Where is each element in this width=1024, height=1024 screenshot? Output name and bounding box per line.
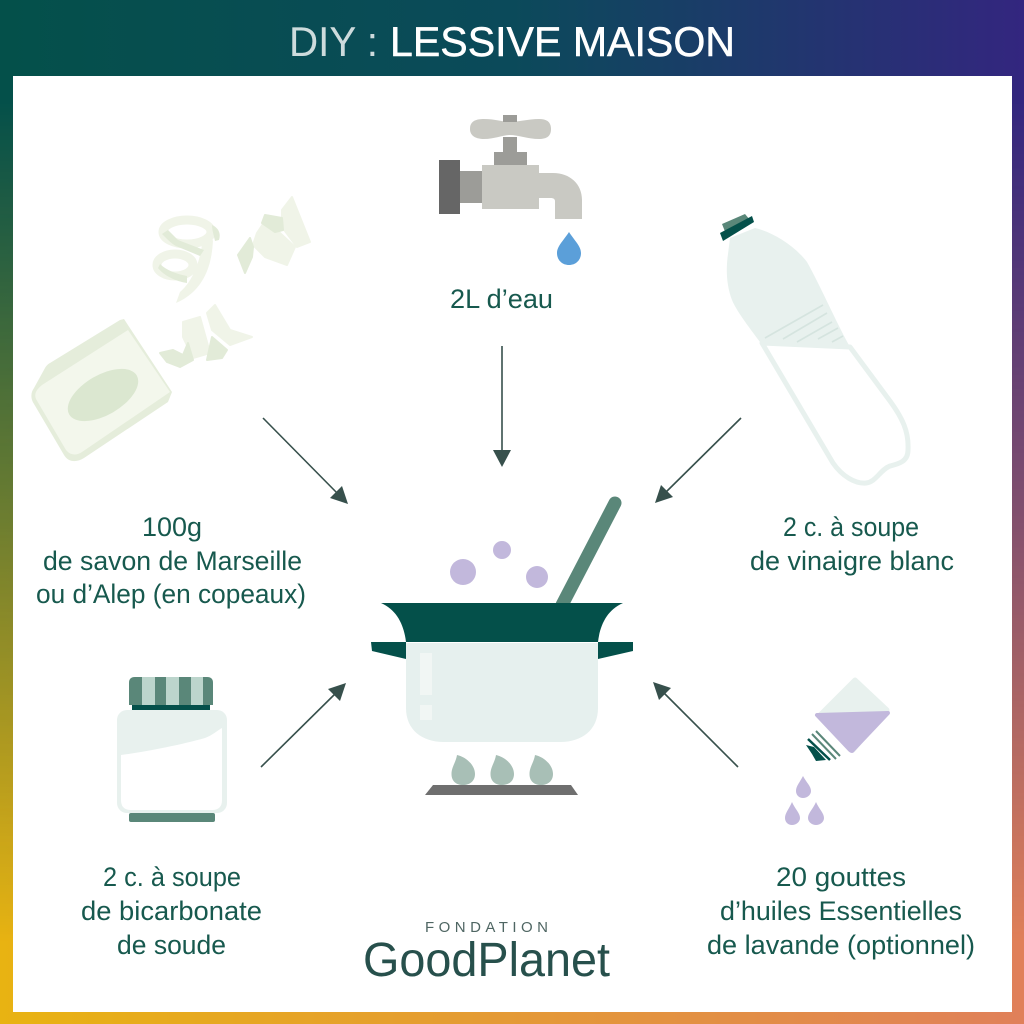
- arrow: vinegar to pot: [655, 418, 741, 503]
- label: soap: de savon de Marseille: [43, 546, 302, 576]
- label: bicarbonate: 2 c. à soupe: [103, 862, 241, 892]
- icon: tap with water drop: [439, 115, 582, 265]
- label: soap: 100g: [142, 512, 202, 542]
- label: essential oils: 20 gouttes: [776, 862, 906, 892]
- icon: bicarbonate jar: [117, 677, 227, 822]
- arrow: bicarbonate to pot: [261, 683, 346, 767]
- icon: essential oil bottle and drops: [785, 680, 888, 825]
- label: essential oils: [707, 862, 975, 960]
- label: soap: [36, 512, 306, 609]
- logo: Fondation GoodPlanet: GoodPlanet: [363, 934, 610, 987]
- icon: vinegar bottle: [720, 214, 908, 483]
- arrow: soap to pot: [263, 418, 348, 504]
- arrow: essential oil to pot: [653, 682, 738, 767]
- label: vinegar: 2 c. à soupe: [783, 512, 919, 542]
- logo: Fondation GoodPlanet: FONDATION: [425, 919, 548, 936]
- label: essential oils: de lavande (optionnel): [707, 930, 975, 960]
- label: water: 2L d’eau: [450, 284, 553, 314]
- label: vinegar: de vinaigre blanc: [750, 546, 954, 576]
- label: soap: ou d’Alep (en copeaux): [36, 579, 306, 609]
- label: bicarbonate: de soude: [117, 930, 226, 960]
- title: LESSIVE MAISON: [390, 18, 735, 65]
- icon: cooking pot on burner: [371, 503, 633, 795]
- label: vinegar: [750, 512, 954, 576]
- label: essential oils: d’huiles Essentielles: [720, 896, 962, 926]
- icon: soap block and shavings: [31, 197, 310, 461]
- title: DIY :: [289, 18, 378, 65]
- label: bicarbonate: [81, 862, 262, 960]
- arrow: water to pot: [493, 346, 511, 467]
- label: bicarbonate: de bicarbonate: [81, 896, 262, 926]
